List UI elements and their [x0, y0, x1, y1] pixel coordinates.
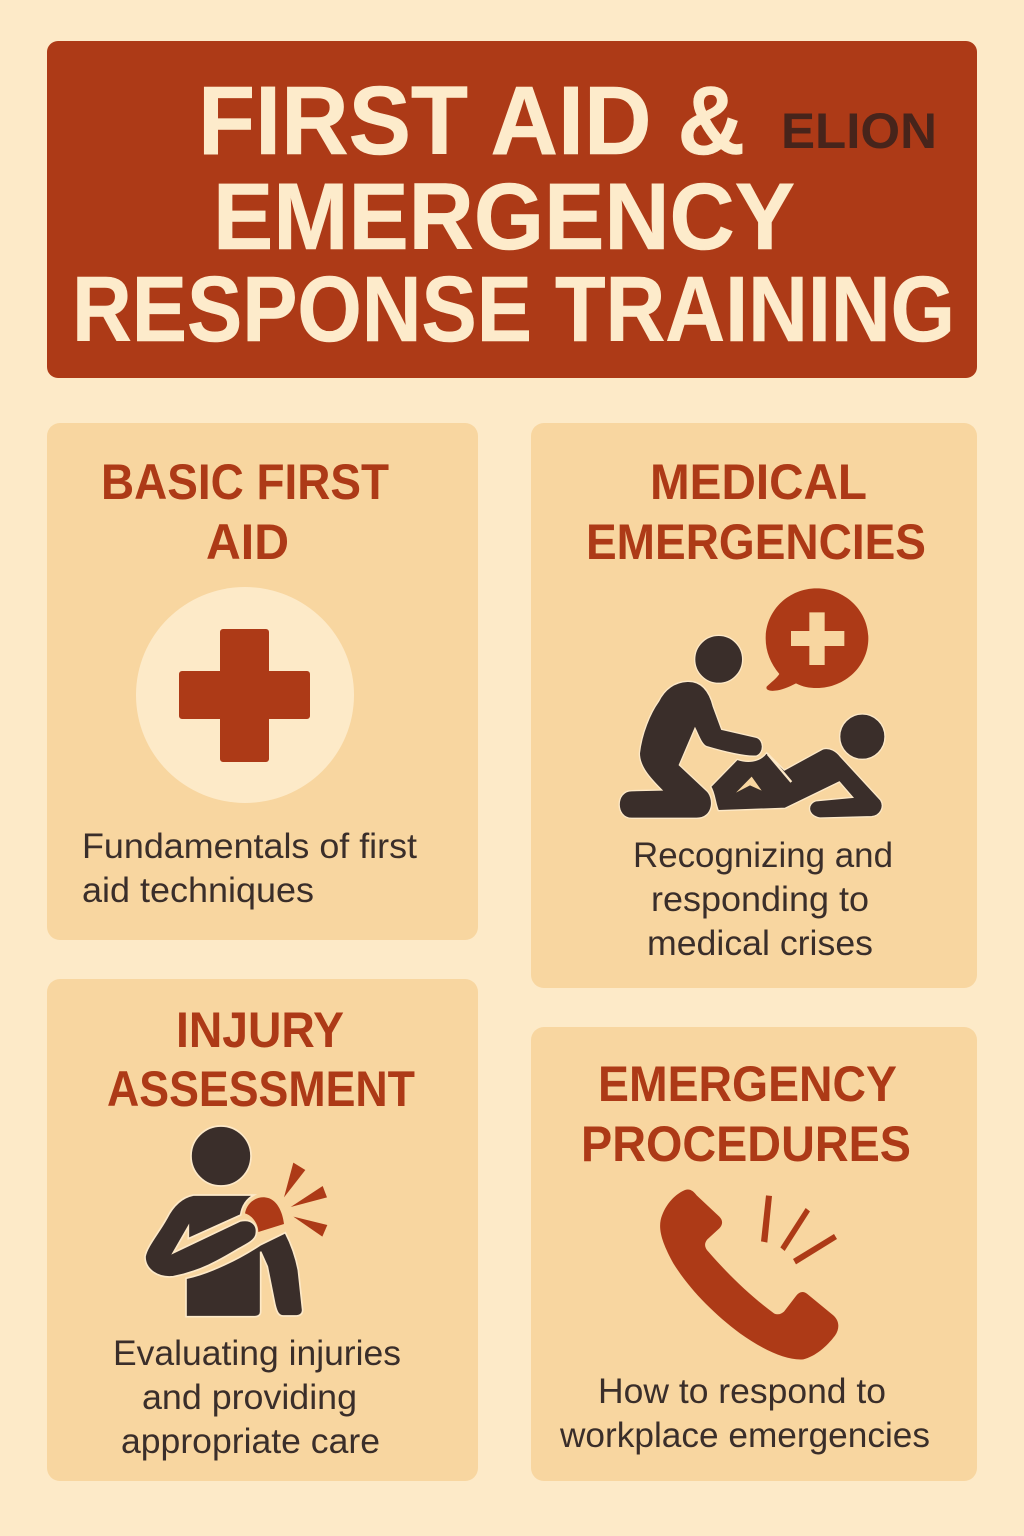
heading: EMERGENCIES: [586, 514, 926, 570]
heading: [581, 1056, 911, 1172]
description: Fundamentals of first: [82, 827, 417, 866]
heading: ASSESSMENT: [107, 1061, 415, 1117]
icon: red cross: [136, 587, 354, 803]
description: [82, 827, 417, 910]
icon: responder helping a patient: [619, 588, 885, 818]
heading: [107, 1002, 415, 1117]
panel: injury assessment: [47, 979, 478, 1481]
heading: PROCEDURES: [581, 1116, 911, 1172]
description: aid techniques: [82, 871, 314, 910]
description: Recognizing and: [633, 836, 893, 875]
responder figure: [619, 635, 762, 818]
heading: AID: [206, 514, 289, 570]
pain highlight: [245, 1197, 284, 1232]
description: [113, 1334, 401, 1461]
heading: MEDICAL: [650, 454, 867, 510]
icon: person holding injured shoulder: [145, 1126, 327, 1317]
speech bubble with cross: [766, 588, 868, 691]
description: responding to: [651, 880, 869, 919]
phone handset: [660, 1189, 838, 1359]
ring lines: [761, 1195, 837, 1264]
description: and providing: [142, 1378, 357, 1417]
description: [559, 1372, 930, 1455]
title: EMERGENCY: [213, 164, 795, 270]
description: How to respond to: [598, 1372, 886, 1411]
panel: basic first aid: [47, 423, 478, 940]
description: Evaluating injuries: [113, 1334, 401, 1373]
heading: EMERGENCY: [598, 1056, 897, 1112]
title: [72, 66, 955, 361]
panel: emergency procedures: [531, 1027, 977, 1481]
heading: INJURY: [176, 1002, 344, 1058]
title banner: [47, 41, 977, 378]
pain rays: [284, 1163, 327, 1237]
heading: [101, 454, 389, 570]
panel: medical emergencies: [531, 423, 977, 988]
description: workplace emergencies: [559, 1416, 930, 1455]
person figure: [145, 1126, 303, 1317]
logo text: ELION: [781, 103, 937, 159]
description: appropriate care: [121, 1422, 380, 1461]
icon: ringing phone: [660, 1189, 838, 1359]
title: FIRST AID &: [198, 66, 745, 175]
description: medical crises: [647, 924, 873, 963]
heading: [586, 454, 926, 570]
patient figure: [711, 714, 885, 818]
description: [633, 836, 893, 963]
heading: BASIC FIRST: [101, 454, 389, 510]
